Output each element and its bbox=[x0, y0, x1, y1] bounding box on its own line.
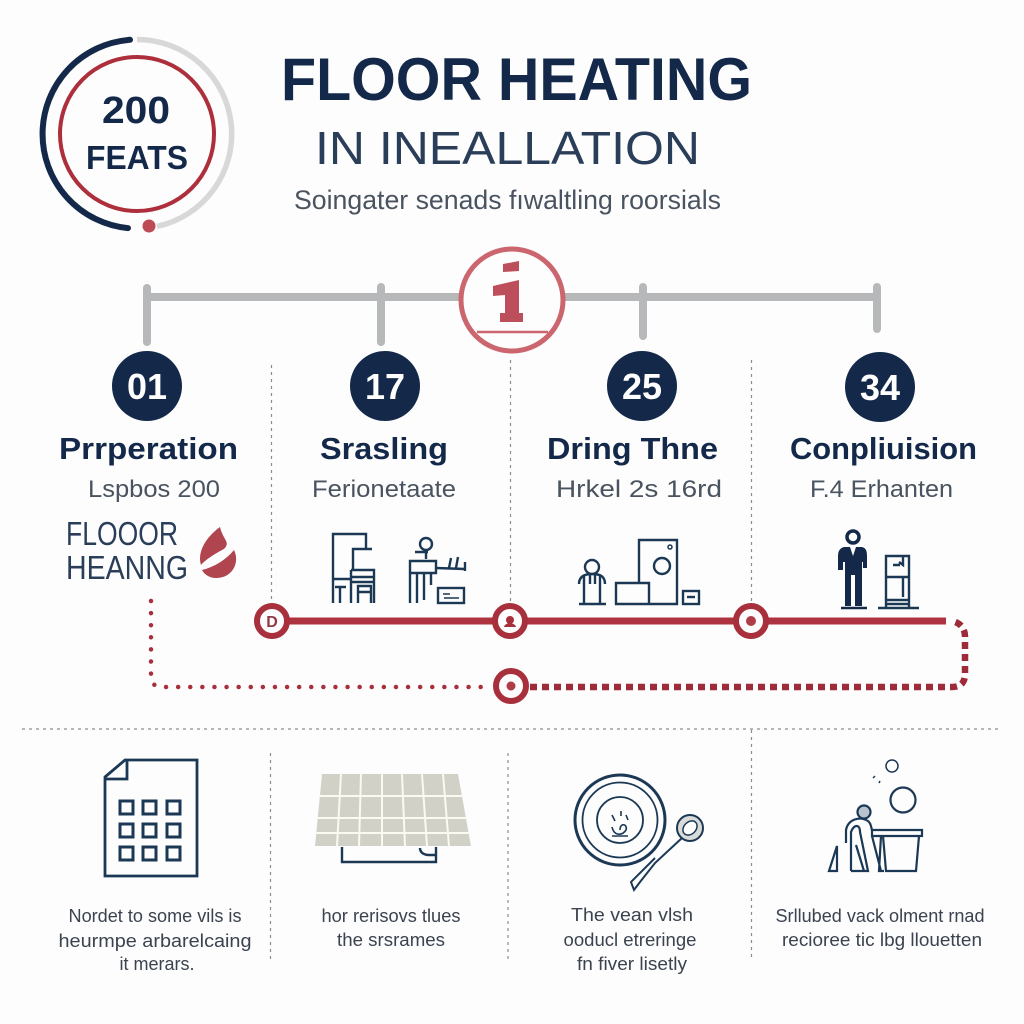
text block 1: Nordet to some vils is bbox=[68, 906, 242, 926]
icon: dial and probe bbox=[575, 775, 703, 890]
icon: kitchen units bbox=[333, 534, 374, 603]
text block 1 bbox=[58, 906, 252, 974]
gray timeline with ticks bbox=[147, 287, 877, 342]
step 1: 01 bbox=[127, 366, 167, 407]
text block 2: the srsrames bbox=[337, 930, 445, 950]
node 2 bbox=[495, 606, 525, 636]
icon: standing person and cabinet bbox=[838, 531, 919, 608]
tagline: Soingater senads fıwaltling roorsials bbox=[294, 185, 721, 215]
text block 1: it merars. bbox=[120, 954, 194, 974]
step 2 bbox=[312, 351, 456, 503]
text block 4: Srllubed vack olment rnad bbox=[776, 906, 984, 926]
step 3: Hrkel 2s 16rd bbox=[556, 476, 722, 503]
dashed return path right bbox=[530, 621, 965, 687]
title: FLOOR HEATING bbox=[281, 46, 752, 113]
node: return path bbox=[496, 671, 526, 701]
badge: 200 feats ring: 200 bbox=[102, 90, 170, 132]
badge: 200 feats ring bbox=[43, 39, 232, 232]
step 4: 34 bbox=[860, 367, 900, 408]
node 1: D bbox=[266, 614, 278, 631]
icon: document grid bbox=[105, 760, 197, 876]
text block 4 bbox=[776, 906, 984, 950]
node 3 bbox=[736, 606, 766, 636]
icon: person at basin bbox=[829, 760, 922, 871]
icon: floor heating panel bbox=[315, 774, 471, 862]
dotted return path left bbox=[151, 601, 490, 687]
icon: info circle bbox=[461, 249, 563, 351]
text block 3 bbox=[564, 905, 696, 974]
text block 1: heurmpe arbarelcaing bbox=[58, 931, 252, 951]
text block 3: The vean vlsh bbox=[571, 905, 693, 925]
step 1: Lspbos 200 bbox=[88, 476, 220, 503]
step 2: Srasling bbox=[320, 431, 448, 466]
icon: workbench and tools bbox=[410, 538, 465, 603]
step 4 bbox=[790, 352, 977, 503]
step 2: 17 bbox=[365, 366, 405, 407]
badge: 200 feats ring: FEATS bbox=[86, 139, 188, 176]
floor heating label bbox=[66, 515, 188, 586]
text block 3: fn fiver lisetly bbox=[577, 954, 687, 974]
step 1 bbox=[59, 351, 238, 503]
text block 2: hor rerisovs tlues bbox=[322, 906, 460, 926]
text block 4: recioree tic lbg llouetten bbox=[782, 930, 982, 950]
step 4: Conpliuision bbox=[790, 431, 977, 466]
red solid timeline bbox=[257, 606, 946, 636]
text block 2 bbox=[322, 906, 460, 950]
icon: gauge person and boiler bbox=[579, 540, 699, 604]
step 3: 25 bbox=[622, 366, 662, 407]
step 3: Dring Thne bbox=[547, 431, 718, 466]
column dividers bbox=[22, 360, 1002, 960]
step 2: Ferionetaate bbox=[312, 476, 456, 503]
text block 3: ooducl etreringe bbox=[564, 930, 696, 950]
subtitle: IN INEALLATION bbox=[315, 122, 700, 174]
icon: red flame drop bbox=[200, 527, 236, 578]
floor heating label: FLOOOR bbox=[66, 515, 178, 552]
step 4: F.4 Erhanten bbox=[810, 476, 953, 503]
step 3 bbox=[547, 351, 722, 503]
floor heating label: HEANNG bbox=[66, 549, 188, 586]
node 1 bbox=[257, 606, 287, 636]
step 1: Prrperation bbox=[59, 431, 238, 466]
